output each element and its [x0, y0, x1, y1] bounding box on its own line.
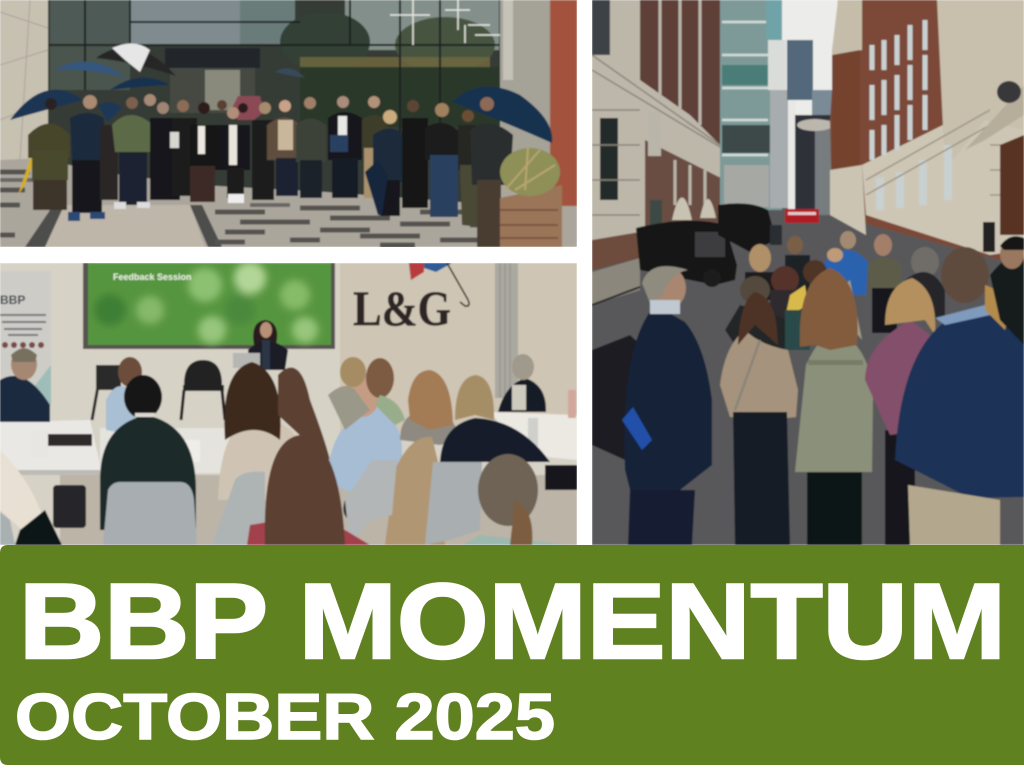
- woman in olive trench: [795, 268, 873, 545]
- dark legs right: [545, 465, 577, 490]
- floor: [60, 475, 577, 545]
- long brown hair woman: [278, 368, 330, 460]
- left building: [592, 0, 727, 270]
- woman with patterned scarf: [865, 278, 935, 545]
- woman foreground ponytail: [463, 454, 570, 545]
- sky: [775, 0, 845, 130]
- tan coat on chair: [385, 437, 445, 545]
- speaker: [248, 320, 288, 370]
- patterned coat: [100, 125, 118, 200]
- exhibition banner: [0, 271, 51, 406]
- right building: [830, 0, 1024, 260]
- women in black coats: [190, 100, 250, 203]
- laptop and stool: [92, 353, 260, 420]
- men in dark centre left: [144, 94, 197, 200]
- presentation screen: [83, 262, 335, 349]
- exhibition banner: BBP: [0, 293, 25, 307]
- man in dark suit: [100, 375, 196, 530]
- attendee left writing: [0, 348, 50, 422]
- white-shirt attendee bottom left: [0, 450, 86, 545]
- panel: street tour in the City of London: [592, 0, 1024, 545]
- distant towers: [787, 40, 833, 215]
- woman in beige jacket: [720, 292, 798, 545]
- man in green jacket: [112, 97, 153, 209]
- centre crowd: [725, 231, 945, 350]
- man in navy blazer, white shirt: [328, 96, 362, 198]
- glass facade: [48, 0, 505, 205]
- men in smart coats: [252, 97, 326, 200]
- attendee in light blue behind: [106, 357, 142, 435]
- glass tower: [720, 0, 796, 210]
- patterned blouse woman: [400, 370, 458, 445]
- grey chair middle: [345, 460, 397, 545]
- pavement: [592, 258, 640, 305]
- parked vans: [636, 203, 782, 287]
- tables: [0, 390, 577, 475]
- paving: [0, 172, 500, 247]
- man with backpack, navy jacket: [592, 266, 712, 545]
- red bus: [785, 209, 819, 223]
- woman with lanyard in navy gilet: [365, 110, 405, 216]
- people on right: [402, 97, 513, 247]
- subtitle date: OCTOBER 2025: [15, 680, 555, 753]
- stone pier and brick wall: [500, 0, 577, 206]
- man in black at far right: [990, 236, 1024, 345]
- main title: BBP MOMENTUM: [19, 561, 1006, 681]
- screen heading: Feedback Session: [113, 272, 192, 282]
- man in navy blazer from behind: [895, 247, 1024, 545]
- planter with ornamental grass: [500, 148, 562, 247]
- panel: group photo with umbrellas outside glass building: [0, 0, 577, 247]
- chair behind woman: [212, 472, 265, 545]
- woman seated in black at head of table: [498, 354, 546, 412]
- man in navy gilet: [68, 95, 105, 221]
- grey chair right: [425, 462, 482, 545]
- curtain: [495, 263, 518, 398]
- left cladded wall: [0, 0, 48, 160]
- panel: feedback session meeting at L&G: [0, 262, 577, 545]
- blue-shirt bald man: [327, 373, 402, 520]
- group of people: [28, 94, 513, 247]
- navy top woman: [440, 375, 550, 462]
- woman foreground long hair: [247, 435, 370, 545]
- umbrellas: [10, 43, 552, 195]
- curly hair woman in cream: [218, 362, 298, 500]
- grey chair front: [103, 482, 197, 545]
- man in olive with tan trousers: [362, 96, 388, 198]
- person far left in olive coat: [28, 98, 70, 210]
- L&G logo: L&G: [353, 280, 451, 336]
- panel: green title banner: [0, 545, 1024, 765]
- seated group behind: [328, 357, 405, 430]
